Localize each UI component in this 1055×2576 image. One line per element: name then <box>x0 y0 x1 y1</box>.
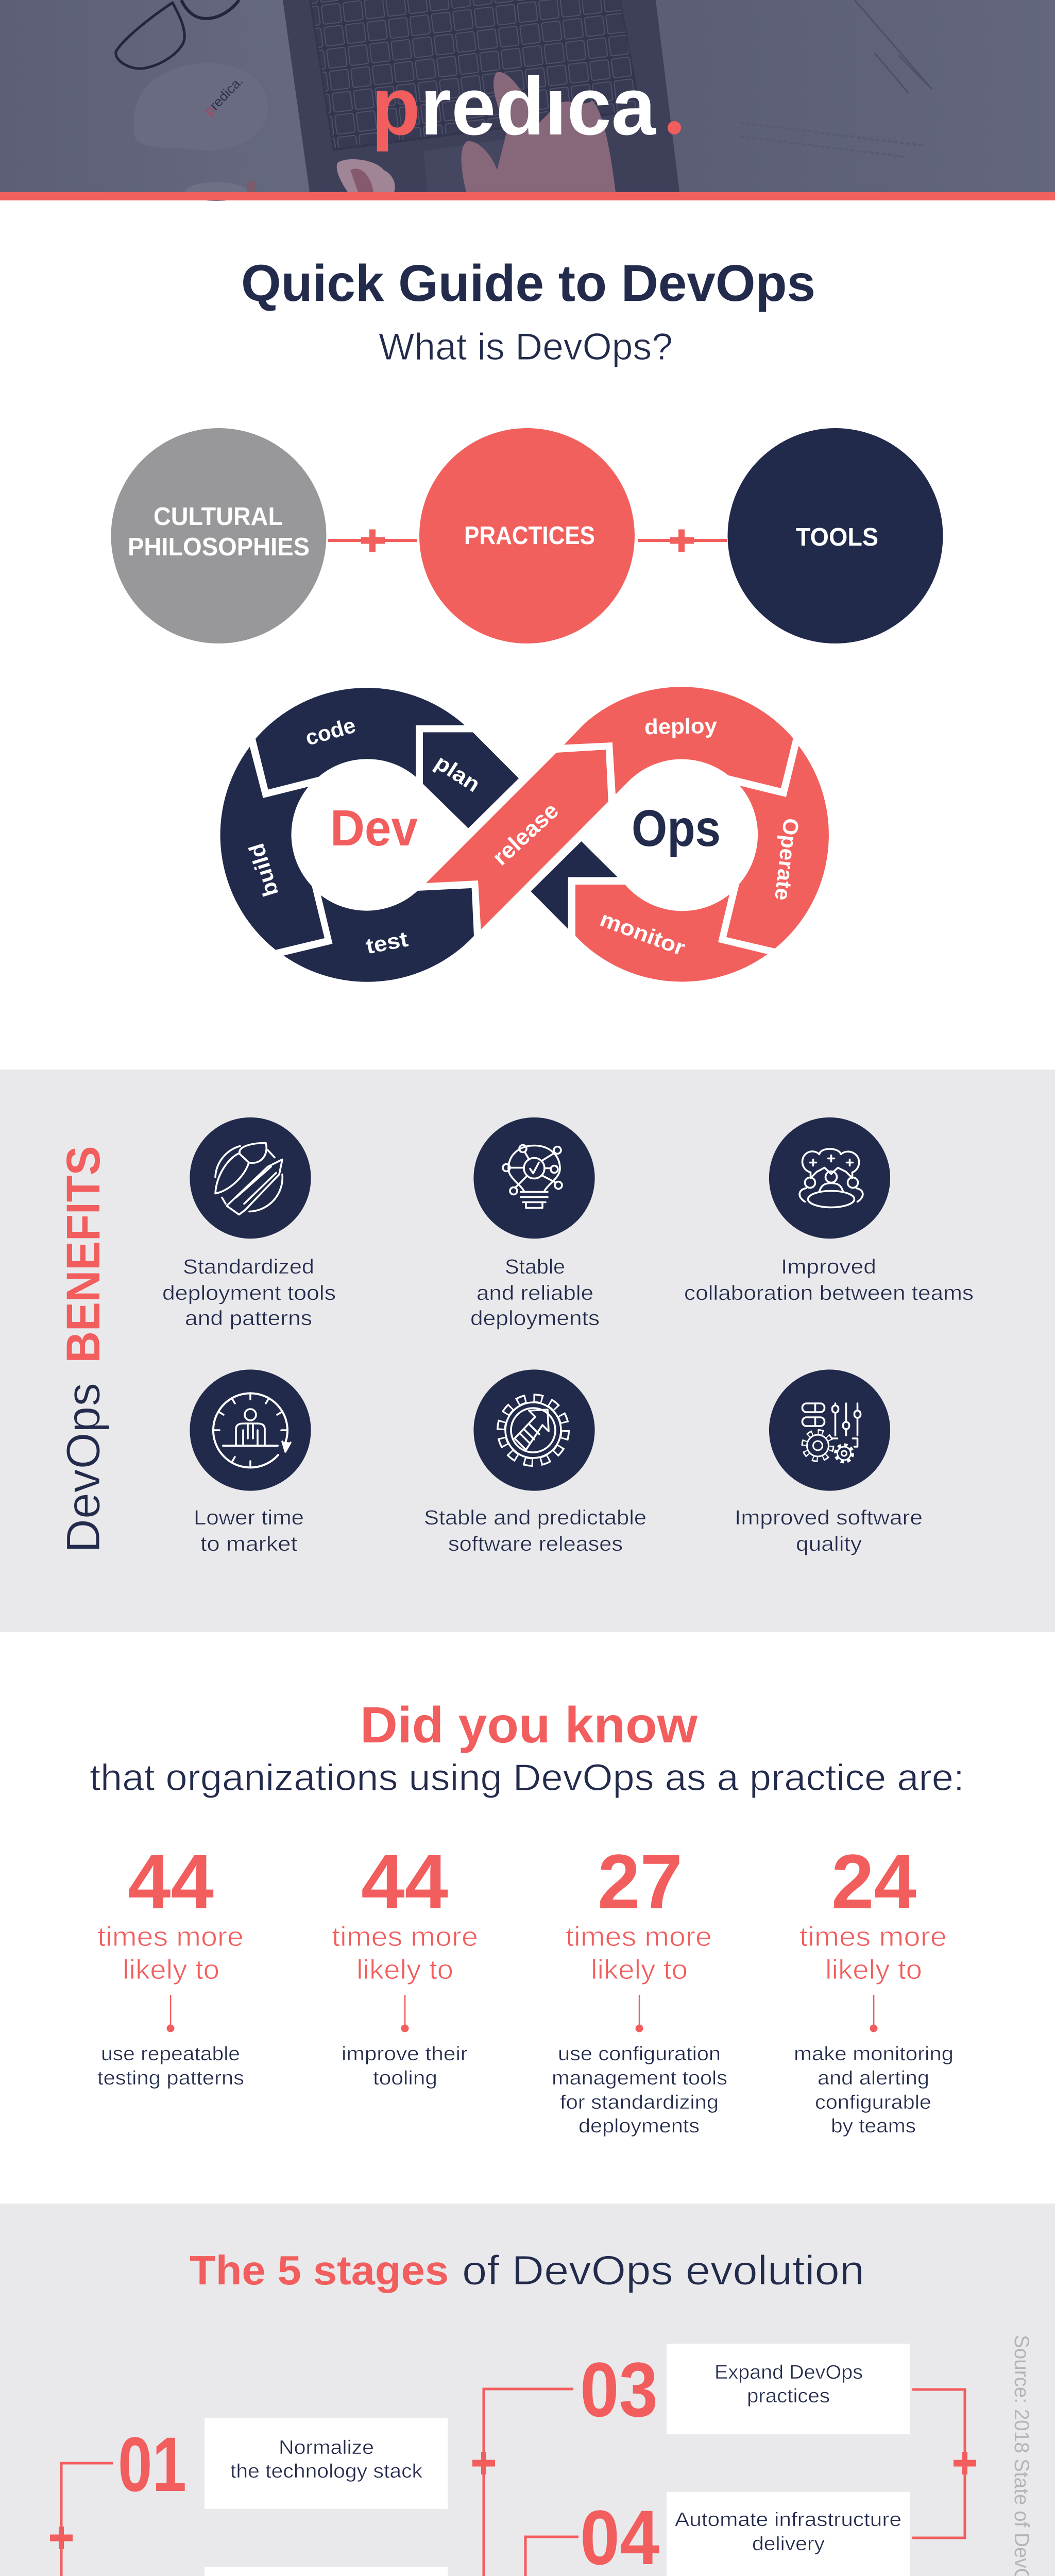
stage 04: Automate infrastructure <box>675 2509 901 2531</box>
circle: practices <box>419 428 635 643</box>
stage 03: Expand DevOps <box>714 2362 863 2383</box>
stage 03: practices <box>747 2385 830 2407</box>
stat: 24 monitoring: times more <box>799 1922 947 1952</box>
icon: sliders and gears <box>803 1403 860 1461</box>
header photo banner <box>0 0 1055 201</box>
stat: 27 configuration tools: deployments <box>578 2115 700 2137</box>
red header bar <box>0 192 1055 200</box>
small object at bottom left <box>185 182 247 201</box>
stat: 27 configuration tools: use configuration <box>558 2043 721 2065</box>
stat: 44 tooling: tooling <box>373 2067 437 2089</box>
vertical heading: BENEFITS <box>57 1146 110 1363</box>
heading: 5 stages <box>190 2247 864 2293</box>
stat: 24 monitoring: and alerting <box>818 2067 929 2089</box>
heading: did you know: Did you know <box>360 1697 698 1753</box>
stat: 44 tooling: likely to <box>356 1955 453 1985</box>
stat: 24 monitoring <box>794 1838 954 2137</box>
stat: 27 configuration tools: 27 <box>598 1838 683 1925</box>
icon: lightbulb network <box>503 1145 562 1208</box>
connector: stages 1-2 <box>50 2463 113 2576</box>
plus connector 2 <box>638 530 727 552</box>
segment: plan <box>423 732 519 828</box>
plus connector 1 <box>328 530 417 552</box>
stage 04: delivery <box>752 2533 825 2555</box>
vertical heading <box>57 1146 110 1553</box>
dev label: Dev <box>330 800 418 856</box>
segment: code: code <box>302 713 358 750</box>
circle: practices: PRACTICES <box>464 522 595 550</box>
stage 03: 03 <box>580 2346 658 2433</box>
stat: 44 testing patterns: use repeatable <box>101 2043 240 2065</box>
stat: 44 tooling: times more <box>332 1922 478 1952</box>
mug logo: predica. <box>201 73 246 118</box>
segment: plan: plan <box>431 750 485 796</box>
benefit: software quality <box>735 1369 923 1555</box>
circle: cultural philosophies: PHILOSOPHIES <box>128 533 310 561</box>
benefit: software quality: Improved software <box>735 1506 923 1529</box>
stat: 24 monitoring: make monitoring <box>794 2043 954 2065</box>
segment: code <box>256 688 465 789</box>
stat: 24 monitoring: by teams <box>831 2115 916 2137</box>
stat: 44 testing patterns: times more <box>97 1922 244 1952</box>
segment: monitor <box>575 885 768 982</box>
stat: 27 configuration tools <box>552 1838 727 2137</box>
DevOps infinity loop <box>220 687 829 982</box>
heading: 5 stages: of DevOps evolution <box>462 2247 864 2293</box>
circle: cultural philosophies: CULTURAL <box>154 503 283 531</box>
stage 04 <box>580 2492 910 2576</box>
segment: deploy <box>564 687 793 794</box>
stage 02 <box>118 2567 448 2576</box>
segment: operate <box>726 746 829 948</box>
segment: build: build <box>244 841 283 900</box>
benefit: time to market <box>190 1369 311 1555</box>
sticker <box>337 159 395 192</box>
logo: predica <box>371 60 657 152</box>
circle: tools: TOOLS <box>796 523 878 551</box>
mug <box>134 63 268 150</box>
circle: cultural philosophies <box>111 428 327 643</box>
stat: 24 monitoring: likely to <box>825 1955 922 1985</box>
stat: 44 tooling: 44 <box>361 1838 448 1925</box>
connector: stages 3-4 <box>912 2389 976 2538</box>
connector: stages 4-5 <box>515 2537 578 2576</box>
stat: 44 testing patterns <box>97 1838 244 2089</box>
segment: test <box>283 888 474 982</box>
segment: operate: Operate <box>770 817 804 902</box>
benefit: stable deployments: and reliable <box>477 1282 593 1304</box>
stat: 27 configuration tools: management tools <box>552 2067 727 2089</box>
stat: 44 tooling: improve their <box>342 2043 468 2065</box>
benefit: standardized tools <box>162 1117 336 1330</box>
benefit: standardized tools: Standardized <box>183 1256 314 1278</box>
stat: 44 testing patterns: 44 <box>128 1838 214 1925</box>
segment: monitor: monitor <box>597 907 688 960</box>
benefit: collaboration: collaboration between teams <box>684 1282 974 1304</box>
benefit: stable deployments: deployments <box>470 1307 600 1330</box>
stage 03 <box>580 2344 910 2434</box>
benefit: predictable releases: software releases <box>448 1533 623 1555</box>
stat: 27 configuration tools: times more <box>566 1922 712 1952</box>
subtitle: What is DevOps? <box>379 326 673 368</box>
benefit: time to market: to market <box>200 1533 297 1555</box>
stat: 44 tooling <box>332 1838 478 2089</box>
icon: gear with arrow <box>501 1398 565 1462</box>
segment: build <box>220 747 325 950</box>
icon: brush and pencil <box>215 1143 282 1215</box>
vertical heading: DevOps <box>57 1383 110 1553</box>
benefit: time to market: Lower time <box>194 1506 304 1529</box>
benefit: predictable releases <box>424 1369 646 1555</box>
stat: 27 configuration tools: likely to <box>591 1955 688 1985</box>
stage 01: 01 <box>118 2421 186 2507</box>
benefit: stable deployments: Stable <box>505 1256 565 1278</box>
panel: 5 stages <box>0 2204 1055 2576</box>
segment: deploy: deploy <box>644 714 718 739</box>
segment: release: release <box>488 798 564 870</box>
panel: DevOps benefits <box>0 1070 1055 1632</box>
icon: team around table <box>799 1149 863 1208</box>
stat: 27 configuration tools: for standardizing <box>560 2092 719 2113</box>
dark arrowhead <box>531 841 618 929</box>
segment: test: test <box>364 927 410 958</box>
laptop <box>283 0 679 192</box>
heading: 5 stages: The 5 stages <box>190 2247 449 2293</box>
title: Quick Guide to DevOps <box>241 255 815 312</box>
benefit: standardized tools: deployment tools <box>162 1282 336 1304</box>
stat: 44 testing patterns: likely to <box>123 1955 219 1985</box>
stat: 44 testing patterns: testing patterns <box>97 2067 244 2089</box>
papers and pens <box>855 0 932 93</box>
stage 01: Normalize <box>279 2437 374 2459</box>
stat: 24 monitoring: 24 <box>831 1838 916 1925</box>
segment: release <box>426 750 608 929</box>
benefit: predictable releases: Stable and predictable <box>424 1506 646 1529</box>
stage 01: the technology stack <box>230 2461 423 2482</box>
icon: clock with person <box>213 1393 291 1467</box>
benefit: collaboration <box>684 1117 974 1304</box>
benefit: software quality: quality <box>796 1533 862 1555</box>
benefit: standardized tools: and patterns <box>185 1307 312 1330</box>
trackpad <box>423 139 510 192</box>
stat: 24 monitoring: configurable <box>815 2092 931 2113</box>
benefit: stable deployments <box>470 1117 600 1330</box>
circle: tools <box>727 428 943 643</box>
hand <box>462 72 616 192</box>
circles: what is DevOps <box>111 428 943 643</box>
connector: stages 2-3 <box>448 2389 573 2576</box>
glasses <box>116 0 239 69</box>
subheading: organizations: that organizations using DevOps as a practice are: <box>90 1757 964 1799</box>
ops label: Ops <box>632 800 721 857</box>
stage 01 <box>118 2418 448 2509</box>
benefit: collaboration: Improved <box>781 1256 876 1278</box>
